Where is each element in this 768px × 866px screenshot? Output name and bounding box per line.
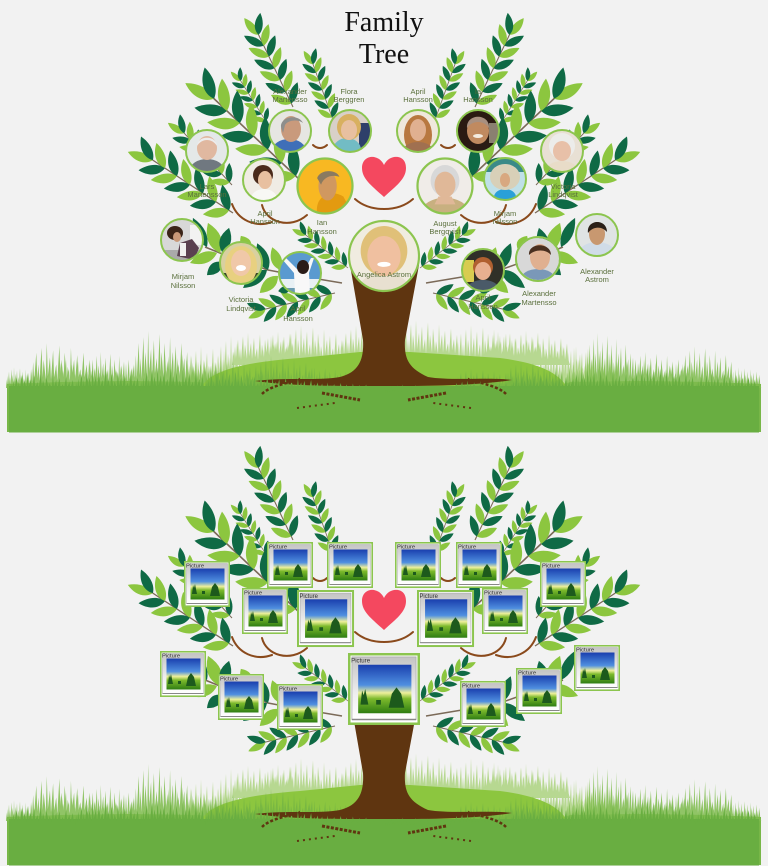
photo: Victoria Lindqvist — [541, 130, 583, 181]
names on the photo tree: Angelica Astrom — [357, 270, 411, 279]
names on the photo tree: Mirjam — [494, 209, 516, 218]
names on the photo tree: Flora — [340, 87, 358, 96]
names on the photo tree: Victoria — [551, 182, 576, 191]
picture frame 8 — [298, 591, 353, 646]
picture frame 2 — [268, 543, 312, 587]
picture frame 14: centre: Picture — [351, 657, 371, 664]
names on the photo tree: Ian — [317, 218, 327, 227]
picture frame 12 — [219, 675, 263, 719]
names on the photo tree: Ia — [475, 87, 482, 96]
names on the photo tree: April — [410, 87, 426, 96]
picture frame 17 — [575, 646, 619, 690]
photo: April Hansson, arms raised — [279, 252, 321, 294]
picture frame 10 — [483, 589, 527, 633]
names on the photo tree — [171, 87, 614, 323]
picture frame 13 — [278, 685, 322, 729]
picture frame 9: Picture — [419, 594, 439, 600]
names on the photo tree: Hansson — [250, 217, 280, 226]
picture frame 14: centre — [349, 654, 419, 724]
photo: April Hansson — [462, 249, 504, 298]
names on the photo tree: April — [475, 293, 491, 302]
names on the photo tree: Astrom — [585, 275, 609, 284]
names on the photo tree: Mirjam — [172, 272, 194, 281]
photo: Alexander Astrom — [576, 214, 618, 264]
photo: Alexander Martensso — [268, 109, 312, 153]
picture frame 8: Picture — [299, 594, 319, 600]
names on the photo tree: Hansson — [283, 314, 313, 323]
names on the photo tree: Martensso — [521, 298, 557, 307]
picture frame 15 — [461, 682, 505, 726]
photo: Ia Hansson — [457, 110, 499, 161]
names on the photo tree: April — [257, 209, 273, 218]
names on the photo tree: April — [290, 304, 306, 313]
photo: Alexander Martensso — [516, 237, 560, 289]
photo: April Hansson — [397, 110, 439, 160]
photo: Flora Berggren — [328, 109, 372, 153]
family tree with photos — [6, 7, 761, 432]
photo: Lars — [186, 130, 228, 181]
names on the photo tree: Hansson — [463, 95, 493, 104]
names on the photo tree: Berggren — [334, 95, 364, 104]
picture frame 1: Picture — [186, 564, 204, 570]
names on the photo tree: Lindqvist — [548, 190, 579, 199]
photo: August Bergqvist — [416, 157, 474, 215]
family tree template with picture placeholders — [6, 440, 761, 866]
picture frame 16 — [517, 669, 561, 713]
title: Family — [344, 7, 424, 38]
picture frame 11 — [161, 652, 205, 696]
names on the photo tree: Hansson — [468, 302, 498, 311]
picture frame 13: Picture — [279, 686, 297, 692]
names on the photo tree: Alexander — [580, 267, 614, 276]
picture frame 7: Picture — [244, 590, 262, 596]
names on the photo tree: August — [433, 219, 458, 228]
picture frame 10: Picture — [484, 590, 502, 596]
names on the photo tree: Hansson — [307, 227, 337, 236]
names on the photo tree: Martensso — [272, 95, 308, 104]
names on the photo tree: Victoria — [229, 295, 254, 304]
picture frame 5 — [457, 543, 501, 587]
photo: Ian Hansson — [297, 158, 353, 214]
picture frame 6: Picture — [542, 564, 560, 570]
title: Tree — [359, 39, 409, 70]
photo: Mirjam Nilsson — [161, 219, 203, 261]
names on the photo tree: Alexander — [273, 87, 307, 96]
picture frame 12: Picture — [220, 676, 238, 682]
picture frame 7 — [243, 589, 287, 633]
photo: Mirjam Nilsson — [484, 158, 526, 205]
picture frame 1 — [185, 562, 229, 606]
photo: Angelica Astrom — [348, 220, 420, 292]
tree illustration: branches, trunk, heart and grass — [6, 440, 761, 866]
tree illustration: branches, trunk, heart and grass — [6, 7, 761, 432]
picture frame 5: Picture — [458, 544, 476, 550]
picture frame 3: Picture — [329, 544, 347, 550]
picture frame 11: Picture — [162, 654, 180, 660]
picture frame 9 — [418, 591, 473, 646]
picture frame 3 — [328, 543, 372, 587]
names on the photo tree: Alexander — [522, 289, 556, 298]
names on the photo tree: Nilsson — [171, 281, 195, 290]
names on the photo tree: Lars — [200, 182, 215, 191]
picture frame 2: Picture — [269, 544, 287, 550]
picture frame 4: Picture — [397, 544, 415, 550]
names on the photo tree: Nilsson — [493, 217, 517, 226]
picture frame 16: Picture — [518, 670, 536, 676]
picture frame 4 — [396, 543, 440, 587]
names on the photo tree: Bergqvist — [429, 227, 462, 236]
names on the photo tree: Martensson — [187, 190, 227, 199]
names on the photo tree: Lindqvist — [226, 304, 257, 313]
photo: Victoria Lindqvist — [220, 242, 262, 286]
picture frame 6 — [541, 562, 585, 606]
photo: April Hansson — [243, 159, 285, 209]
names on the photo tree: Hansson — [403, 95, 433, 104]
picture frame 15: Picture — [462, 684, 480, 690]
picture frame 17: Picture — [576, 648, 594, 654]
